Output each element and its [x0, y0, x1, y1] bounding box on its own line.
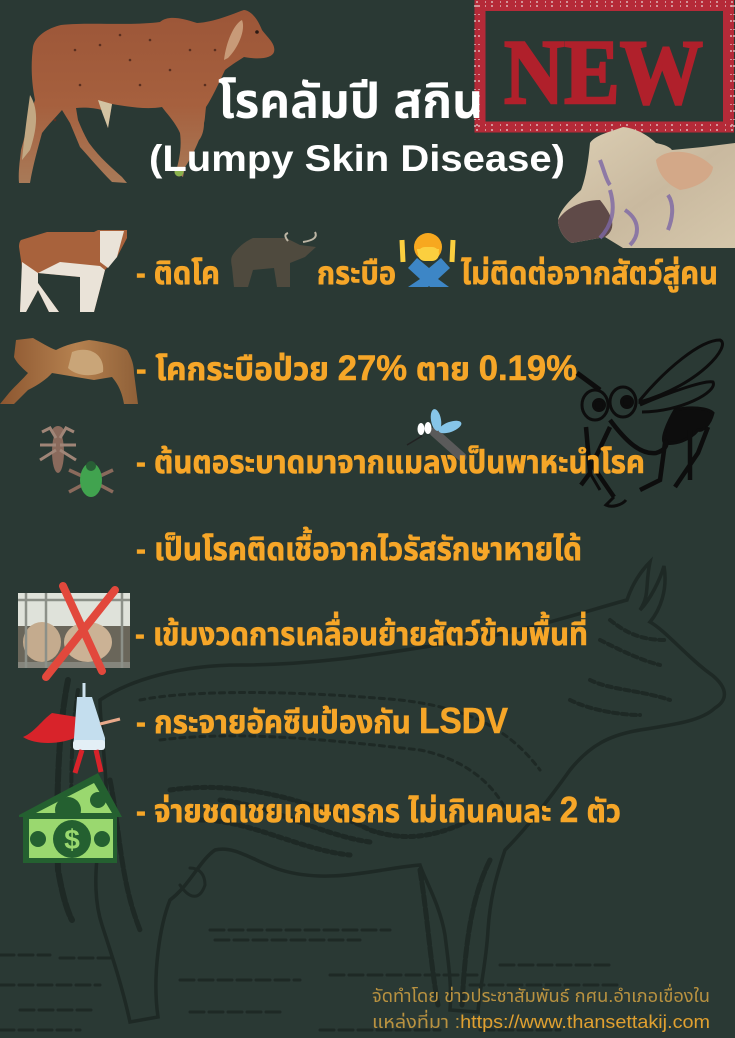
footer credits: แหล่งที่มา : https://www.thansettakij.com — [372, 1009, 710, 1032]
row 2 text: morbidity and mortality: - โคกระบือป่วย 27% ตาย 0.19% — [136, 349, 577, 388]
image: hereford cow — [19, 230, 127, 312]
icon: superhero vaccine syringe — [23, 683, 120, 773]
image: sick cow — [0, 338, 138, 404]
stamp: NEW: NEW — [504, 21, 703, 123]
image: brown cow with lumps — [19, 10, 274, 183]
icon: money stack — [19, 773, 122, 863]
icon: money stack: $ — [64, 824, 80, 855]
icon: termite — [40, 426, 76, 473]
emoji: person gesturing no — [402, 233, 453, 287]
row 3 text: vector insects: - ต้นตอระบาดมาจากแมลงเป็นพาหะนำโรค — [136, 444, 645, 480]
background cow illustration — [0, 562, 724, 1030]
title: โรคลัมปี สกิน — [218, 75, 483, 129]
image: cow with skin lesions — [558, 127, 735, 248]
row 4 text: viral infection: - เป็นโรคติดเชื้อจากไวรัสรักษาหายได้ — [136, 526, 582, 567]
image: buffalo — [231, 232, 316, 287]
subtitle: (Lumpy Skin Disease) — [149, 138, 565, 179]
footer credits — [372, 983, 710, 1032]
row 1 text: infected species: กระบือ — [317, 255, 396, 291]
icon: green beetle — [69, 461, 113, 497]
footer credits: จัดทำโดย ข่าวประชาสัมพันธ์ กศน.อำเภอเขื่องใน — [372, 983, 710, 1006]
row 6 text: vaccine distribution: - กระจายอัคซีนป้องกัน LSDV — [136, 700, 508, 741]
icon: large black mosquito — [577, 340, 722, 506]
row 1 text: infected species — [136, 255, 718, 292]
image: penned cattle crossed out — [18, 586, 130, 677]
row 7 text: farmer compensation: - จ่ายชดเชยเกษตรกร ไม่เกินคนละ 2 ตัว — [136, 789, 621, 830]
stamp: NEW — [475, 2, 735, 130]
row 1 text: infected species: - ติดโค — [136, 255, 220, 291]
icon: small mosquito — [407, 408, 463, 457]
row 1 text: infected species: ไม่ติดต่อจากสัตว์สู่คน — [461, 255, 718, 292]
row 5 text: movement control: - เข้มงวดการเคลื่อนย้ายสัตว์ข้ามพื้นที่ — [135, 611, 588, 652]
